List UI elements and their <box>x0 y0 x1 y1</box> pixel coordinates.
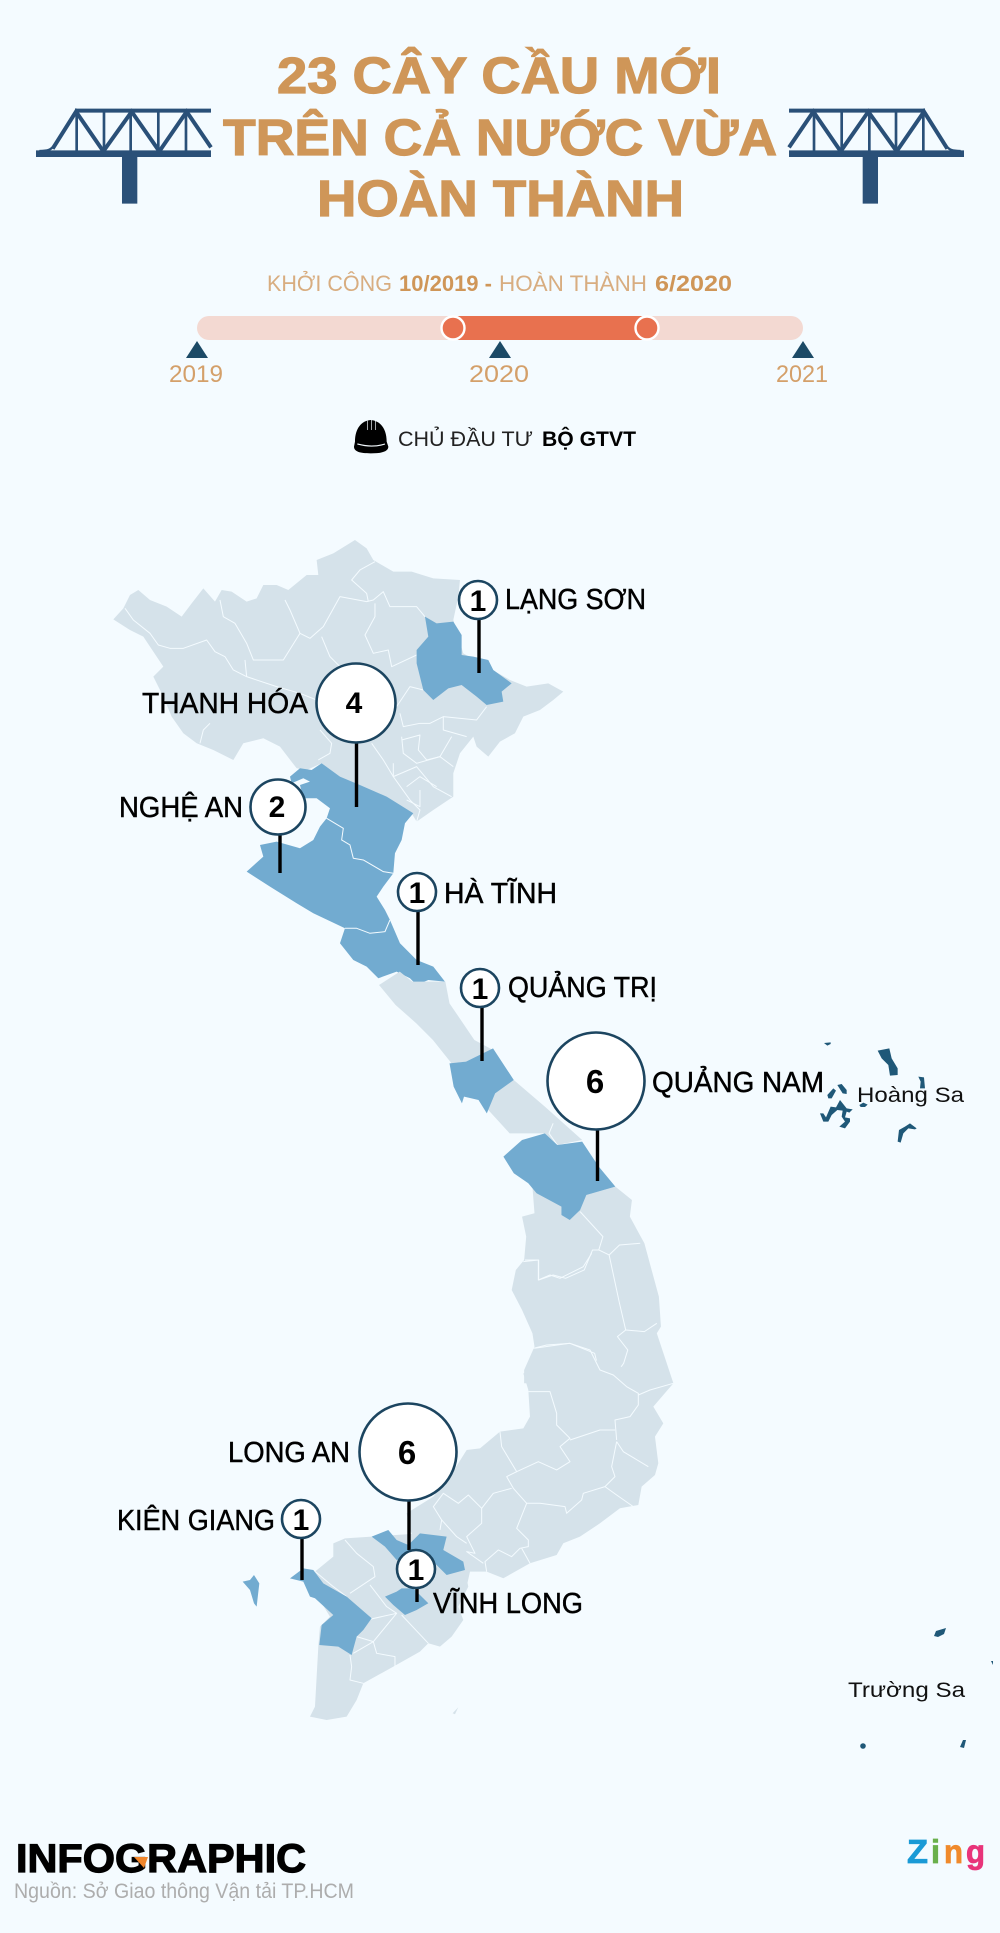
timeline active period <box>453 316 647 340</box>
source text: Nguồn: Sở Giao thông Vận tải TP.HCM <box>14 1880 354 1903</box>
logo: Zing: i <box>931 1833 940 1870</box>
icon: left bridge <box>36 111 211 204</box>
logo: Zing <box>907 1833 985 1870</box>
subtitle: construction dates: KHỞI CÔNG <box>267 271 392 296</box>
callout: Quang Tri <box>461 969 657 1061</box>
callout: Quang Tri: QUẢNG TRỊ <box>508 970 657 1004</box>
map: Mekong delta <box>243 1530 468 1720</box>
callout: Lang Son <box>459 581 646 673</box>
callout: Ha Tinh: HÀ TĨNH <box>444 876 557 910</box>
map: central provinces <box>379 972 673 1390</box>
callout: Lang Son: 1 <box>470 585 486 618</box>
callout: Kien Giang: 1 <box>293 1504 309 1537</box>
label: Truong Sa: Trường Sa <box>848 1679 965 1702</box>
timeline <box>169 316 828 388</box>
callout: Long An: 6 <box>398 1434 416 1471</box>
province: Nghe An <box>247 818 393 933</box>
callout: Quang Nam: 6 <box>586 1063 604 1100</box>
callout: Vinh Long: 1 <box>408 1554 424 1587</box>
island: Phu Quoc <box>243 1575 259 1607</box>
label: Hoang Sa: Hoàng Sa <box>857 1084 964 1107</box>
callout: Thanh Hoa: 4 <box>346 687 363 720</box>
map of Vietnam <box>113 540 673 1720</box>
callout: Quang Tri: 1 <box>472 973 488 1006</box>
province: Kien Giang <box>290 1568 372 1655</box>
callout: Long An <box>228 1404 456 1550</box>
year 2021: 2021 <box>776 361 828 388</box>
title: HOÀN THÀNH <box>317 170 684 227</box>
logo: Zing: n <box>944 1833 963 1870</box>
icon: right bridge <box>789 111 964 204</box>
tick 2021 <box>792 341 814 358</box>
investor text: BỘ GTVT <box>542 427 636 451</box>
tick 2019 <box>186 341 208 358</box>
province: Quang Tri <box>450 1048 514 1113</box>
province: Ha Tinh <box>340 920 445 985</box>
year 2019: 2019 <box>169 361 223 388</box>
map: northern provinces <box>113 540 563 985</box>
subtitle: construction dates: 10/2019 - <box>399 271 492 296</box>
title <box>223 46 777 227</box>
icon: hard hat <box>354 420 388 453</box>
callout: Long An: LONG AN <box>228 1437 350 1469</box>
callout: Thanh Hoa: THANH HÓA <box>142 687 309 720</box>
callout: Quang Nam <box>548 1032 824 1181</box>
subtitle: construction dates: HOÀN THÀNH <box>499 271 647 296</box>
tick 2020 <box>489 341 511 358</box>
investor text <box>398 427 636 451</box>
title: 23 CÂY CẦU MỚI <box>277 46 721 104</box>
timeline track <box>197 316 803 340</box>
timeline end marker <box>636 316 658 340</box>
callout: Thanh Hoa <box>142 664 396 807</box>
province: Lang Son <box>417 617 512 705</box>
province: Quang Nam <box>503 1133 615 1220</box>
timeline start marker <box>442 316 464 340</box>
callout: Kien Giang: KIÊN GIANG <box>117 1504 275 1537</box>
map: southern provinces <box>407 1253 673 1587</box>
callout: Quang Nam: QUẢNG NAM <box>652 1065 824 1099</box>
Truong Sa islands <box>860 1628 993 1749</box>
callout: Nghe An: NGHỆ AN <box>119 791 243 824</box>
year 2020: 2020 <box>469 361 529 388</box>
province: Vinh Long <box>385 1588 428 1615</box>
province: Long An <box>372 1530 465 1575</box>
callout: Kien Giang <box>117 1500 320 1580</box>
logo: Zing: Z <box>907 1833 928 1870</box>
callout: Nghe An: 2 <box>269 791 285 824</box>
investor text: CHỦ ĐẦU TƯ <box>398 427 533 451</box>
Hoang Sa islands <box>820 1042 925 1143</box>
subtitle: construction dates <box>267 271 732 296</box>
callout: Vinh Long <box>397 1550 583 1620</box>
title: TRÊN CẢ NƯỚC VỪA <box>223 108 777 166</box>
callout: Nghe An <box>119 780 306 873</box>
subtitle: construction dates: 6/2020 <box>655 271 732 296</box>
callout: Ha Tinh: 1 <box>409 877 425 910</box>
logo: infographic: INFOGRAPHIC <box>16 1837 306 1881</box>
callout: Ha Tinh <box>398 873 557 965</box>
callout: Lang Son: LẠNG SƠN <box>505 584 646 616</box>
province: Thanh Hoa <box>290 763 413 873</box>
callout: Vinh Long: VĨNH LONG <box>433 1586 583 1620</box>
logo: Zing: g <box>966 1833 985 1870</box>
